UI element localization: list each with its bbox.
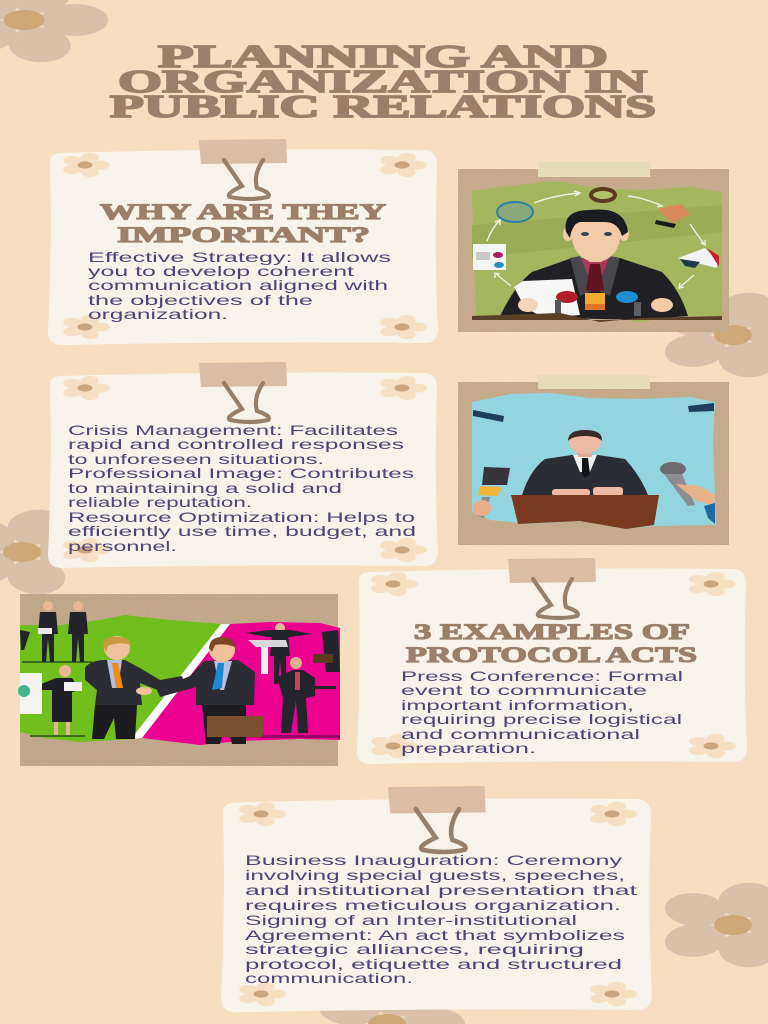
text block: crisis, image, resources: Crisis Management: Facilitates bbox=[68, 422, 398, 438]
panel: 3 examples of protocol acts bbox=[357, 558, 747, 764]
lights bbox=[473, 410, 504, 422]
papers bbox=[514, 279, 580, 318]
arrows bbox=[487, 191, 705, 288]
icon: megaphone bbox=[678, 248, 717, 268]
torn bottom edge bbox=[472, 313, 722, 322]
heading: examples: 3 EXAMPLES OF bbox=[414, 619, 690, 644]
head bbox=[572, 210, 620, 262]
text block: inauguration and agreement: Agreement: An act that symbolizes bbox=[245, 927, 625, 943]
right businessman bbox=[136, 637, 263, 744]
heading: examples: PROTOCOL ACTS bbox=[406, 642, 697, 667]
text block: inauguration and agreement: requires meticulous organization. bbox=[245, 897, 621, 913]
text block: crisis, image, resources: personnel. bbox=[68, 538, 177, 554]
briefcase bbox=[207, 716, 263, 737]
green half bbox=[20, 615, 222, 742]
heading: examples bbox=[406, 619, 697, 667]
heading: why are they important bbox=[100, 199, 386, 247]
pink half bbox=[142, 622, 340, 745]
text block: crisis, image, resources bbox=[68, 422, 416, 554]
text block: press conference: and communicational bbox=[401, 726, 640, 742]
text block: crisis, image, resources: rapid and controlled responses bbox=[68, 436, 404, 452]
panel: inauguration and agreement bbox=[221, 786, 652, 1012]
text block: inauguration and agreement: involving special guests, speeches, bbox=[245, 867, 625, 883]
icon: hand bbox=[658, 204, 690, 224]
panel: crisis management and image bbox=[48, 362, 438, 568]
text block: effective strategy: communication aligned with bbox=[88, 277, 388, 293]
suit bbox=[500, 258, 688, 320]
text block: crisis, image, resources: Professional Image: Contributes bbox=[68, 465, 414, 481]
heading: why are they important: IMPORTANT? bbox=[117, 222, 370, 247]
panel: why are they important bbox=[48, 139, 438, 345]
icon: binder clip bbox=[199, 362, 287, 422]
white stripe bbox=[131, 624, 230, 739]
icon: binder clip bbox=[388, 786, 486, 852]
text block: inauguration and agreement: Business Inauguration: Ceremony bbox=[245, 852, 622, 868]
title: PLANNING AND bbox=[158, 38, 608, 74]
text block: effective strategy: Effective Strategy: It allows bbox=[88, 249, 391, 265]
text block: press conference: preparation. bbox=[401, 740, 536, 756]
right microphone bbox=[660, 462, 715, 524]
desk bbox=[511, 495, 659, 529]
text block: press conference: event to communicate bbox=[401, 682, 647, 698]
photo: business handshake bbox=[18, 594, 340, 766]
text block: inauguration and agreement: Signing of an Inter-institutional bbox=[245, 912, 577, 928]
text block: crisis, image, resources: to unforeseen situations. bbox=[68, 451, 324, 467]
small figures bbox=[18, 601, 340, 735]
text block: inauguration and agreement: strategic alliances, requiring bbox=[245, 941, 584, 957]
text block: inauguration and agreement bbox=[245, 852, 637, 986]
icon: binder clip bbox=[199, 139, 287, 199]
flower: bottom edge bbox=[307, 978, 465, 1024]
text block: effective strategy bbox=[88, 249, 391, 322]
flower: top left bbox=[0, 0, 108, 66]
title: ORGANIZATION IN bbox=[118, 63, 647, 99]
text block: effective strategy: the objectives of the bbox=[88, 292, 313, 308]
heading: why are they important: WHY ARE THEY bbox=[100, 199, 386, 224]
text block: inauguration and agreement: communication. bbox=[245, 970, 413, 986]
speaker bbox=[522, 455, 648, 495]
text block: inauguration and agreement: protocol, etiquette and structured bbox=[245, 956, 622, 972]
left businessman bbox=[85, 636, 184, 739]
text block: crisis, image, resources: efficiently use time, budget, and bbox=[68, 523, 416, 539]
text block: crisis, image, resources: Resource Optimization: Helps to bbox=[68, 509, 415, 525]
icon: gear bbox=[591, 189, 615, 201]
text block: inauguration and agreement: and institutional presentation that bbox=[245, 882, 637, 898]
floor lines bbox=[22, 661, 92, 663]
tape bbox=[538, 375, 650, 389]
text block: crisis, image, resources: to maintaining a solid and bbox=[68, 480, 342, 496]
text block: effective strategy: you to develop coherent bbox=[88, 263, 354, 279]
icon: globe bbox=[497, 202, 533, 222]
flower: right middle bbox=[653, 289, 768, 381]
photo: speaker with communication cycle bbox=[458, 162, 729, 332]
flower: bottom right bbox=[653, 879, 768, 971]
photo: press conference speaker bbox=[458, 375, 729, 545]
left microphone bbox=[473, 467, 510, 518]
title bbox=[110, 38, 656, 124]
microphones bbox=[556, 291, 578, 303]
flower: left middle bbox=[0, 506, 100, 598]
text block: effective strategy: organization. bbox=[88, 306, 228, 322]
text block: press conference: Press Conference: Formal bbox=[401, 668, 683, 684]
tape bbox=[538, 162, 650, 177]
title: PUBLIC RELATIONS bbox=[110, 88, 656, 124]
text block: crisis, image, resources: reliable reputation. bbox=[68, 494, 252, 510]
text block: press conference: requiring precise logistical bbox=[401, 711, 682, 727]
text block: press conference bbox=[401, 668, 683, 756]
icon: binder clip bbox=[508, 558, 596, 618]
text block: press conference: important information, bbox=[401, 697, 634, 713]
icon: report bbox=[473, 244, 506, 270]
